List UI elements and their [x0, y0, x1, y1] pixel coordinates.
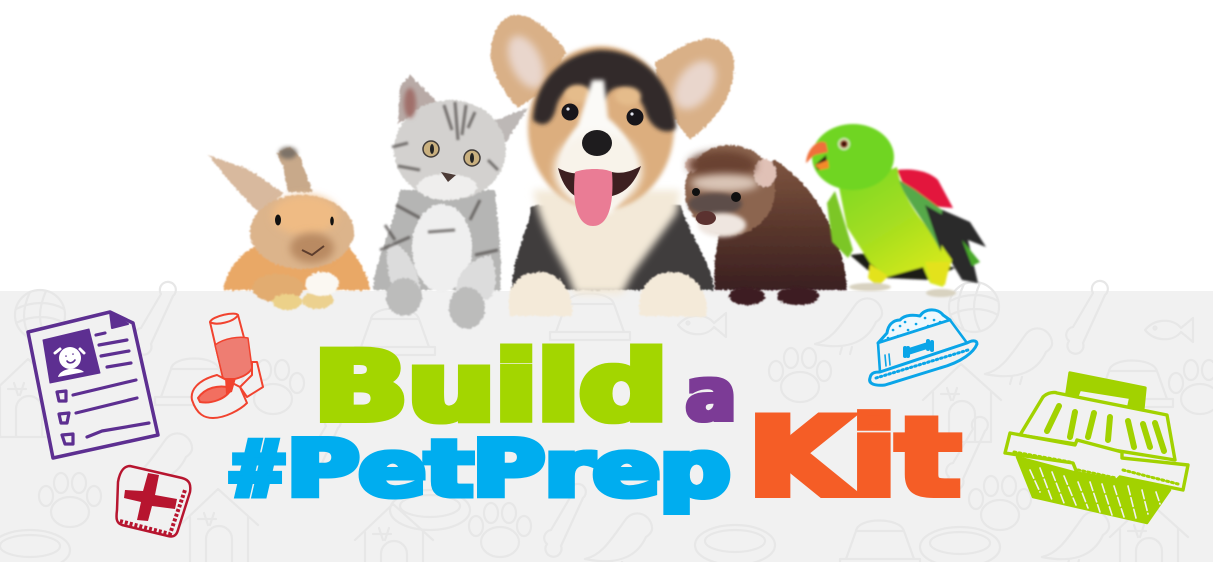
- background pattern of pet doodles: [0, 281, 1213, 562]
- puppy tongue: [574, 169, 612, 226]
- icon: pet water bottle feeder: [192, 314, 263, 418]
- title word: a: a: [686, 352, 736, 438]
- title word: Build: Build: [314, 332, 667, 444]
- photo: parrot: [806, 124, 986, 297]
- title word: Kit: Kit: [748, 394, 960, 521]
- icon: pet records document: [28, 312, 158, 458]
- photo: corgi puppy: [491, 15, 734, 317]
- parrot feet: [849, 283, 956, 297]
- puppy paws: [509, 272, 707, 317]
- panel: grey banner: [0, 281, 1213, 562]
- photo: ferret: [685, 145, 847, 305]
- carrier basket: [1017, 457, 1170, 523]
- title word: PetPrep: PetPrep: [287, 424, 730, 514]
- icon: pet carrier: [1005, 373, 1188, 523]
- title word: #: #: [227, 423, 287, 515]
- ferret paws: [729, 287, 819, 305]
- rabbit paws: [252, 272, 339, 310]
- bone on bowl: [907, 345, 929, 352]
- photo of dog on document: [43, 329, 100, 383]
- photo: kitten: [373, 75, 528, 329]
- icon: food bowl with bone: [870, 310, 977, 385]
- photo: rabbit: [208, 147, 370, 310]
- heading: Build a #PetPrep Kit: [227, 332, 960, 521]
- carrier rim and door: [1005, 433, 1188, 490]
- icon: first aid kit: [117, 466, 190, 536]
